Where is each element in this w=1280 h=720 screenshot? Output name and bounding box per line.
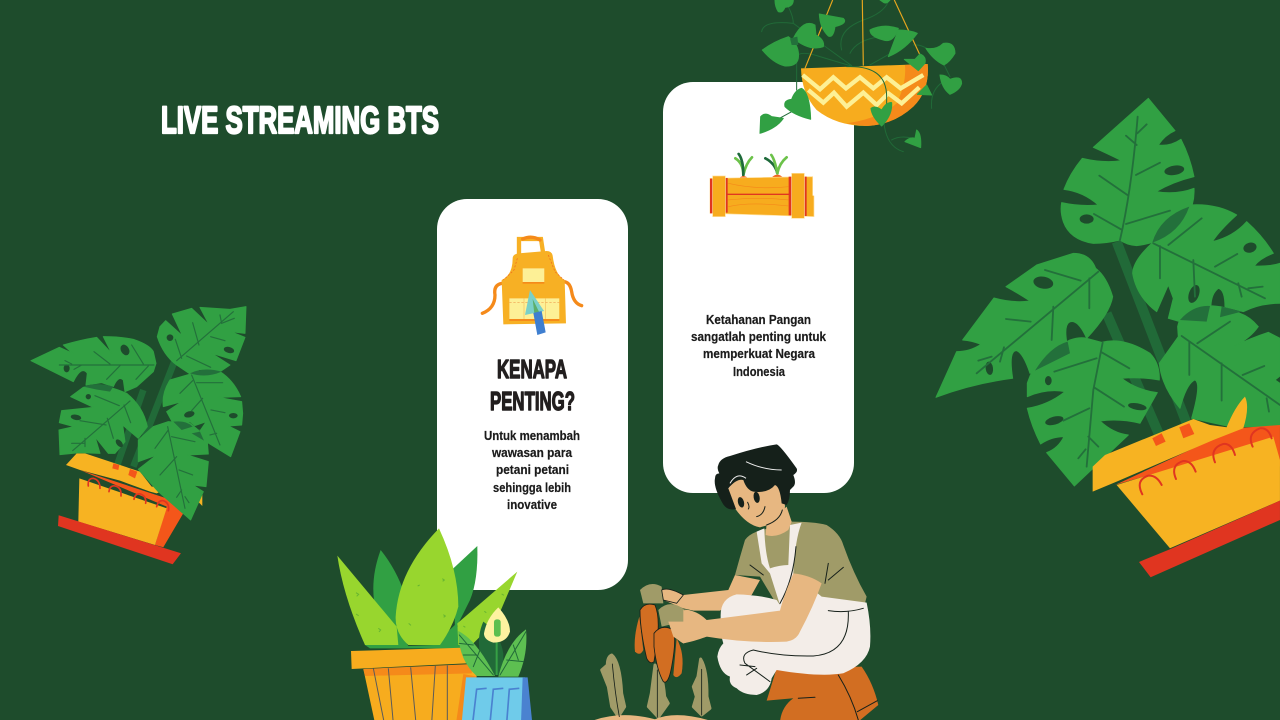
trousers bbox=[767, 667, 878, 720]
text block: ketahanan pangan body bbox=[691, 312, 827, 379]
illustration: potted plants bottom bbox=[337, 528, 532, 720]
icon: wooden crate with sprouts bbox=[710, 154, 814, 218]
heading: kenapa penting: PENTING? bbox=[490, 386, 575, 416]
text block: kenapa penting body: wawasan para bbox=[491, 445, 573, 460]
blue pot bbox=[462, 677, 532, 720]
text block: kenapa penting body: inovative bbox=[507, 497, 557, 512]
text block: ketahanan pangan body: Indonesia bbox=[733, 364, 786, 379]
icon: apron with trowel bbox=[482, 237, 582, 335]
illustration: monstera plant left bbox=[31, 307, 246, 564]
apron bbox=[717, 523, 870, 695]
title: LIVE STREAMING BTS bbox=[161, 100, 439, 142]
orange pot bbox=[351, 648, 477, 720]
back arm bbox=[662, 575, 760, 611]
illustration: gardener with carrots bbox=[590, 444, 878, 720]
text block: kenapa penting body: Untuk menambah bbox=[484, 428, 580, 443]
sprouts bbox=[590, 655, 713, 720]
text block: kenapa penting body: petani petani bbox=[496, 462, 569, 477]
illustration: monstera plant right bbox=[936, 98, 1280, 577]
front arm bbox=[668, 573, 822, 643]
bowl bbox=[801, 64, 928, 126]
panel: ketahanan pangan bbox=[663, 82, 854, 493]
panel: kenapa penting bbox=[437, 199, 628, 590]
text block: ketahanan pangan body: Ketahanan Pangan bbox=[706, 312, 811, 327]
carrots bbox=[635, 584, 707, 682]
pot right bbox=[1093, 397, 1280, 577]
pot left bbox=[58, 453, 202, 564]
text block: kenapa penting body: sehingga lebih bbox=[493, 480, 571, 495]
heading: kenapa penting bbox=[490, 354, 575, 416]
heading: kenapa penting: KENAPA bbox=[497, 354, 567, 384]
text block: kenapa penting body bbox=[484, 428, 580, 512]
text block: ketahanan pangan body: sangatlah penting untuk bbox=[691, 329, 827, 344]
text block: ketahanan pangan body: memperkuat Negara bbox=[703, 346, 816, 361]
illustration: hanging plant bbox=[760, 0, 962, 152]
shirt bbox=[735, 522, 867, 610]
head bbox=[715, 444, 797, 527]
